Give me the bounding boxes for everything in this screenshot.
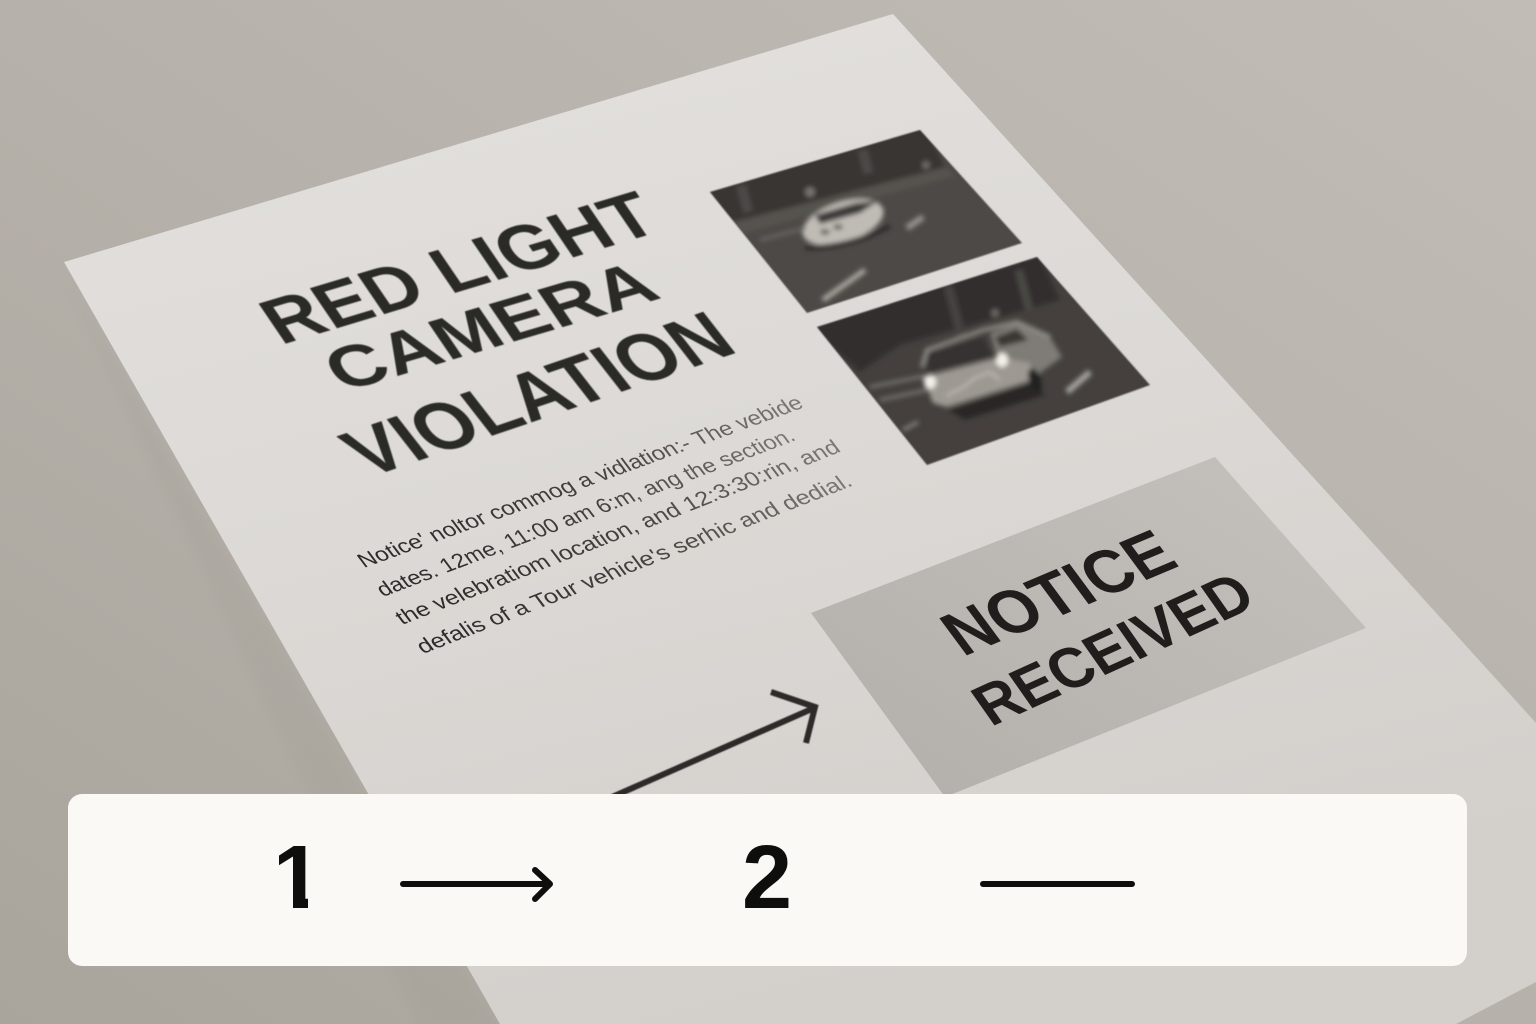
- body line 4: defalis of a Tour vehicle's serhic and dedial.: [412, 470, 857, 658]
- body line 2: dates. 12me, 11:00 am 6:m, ang the section.: [372, 425, 800, 601]
- headline: red light camera violation: [245, 178, 750, 491]
- arrow on paper pointing to notice box: [612, 692, 815, 797]
- paper shadow: [60, 268, 500, 1024]
- arrow between steps: [403, 870, 550, 899]
- headline line 1: RED LIGHT: [245, 178, 671, 357]
- body paragraph: [353, 392, 857, 658]
- camera photo 1: blurred car on road: [709, 129, 1022, 314]
- camera photo 2: car close-up on road: [816, 256, 1150, 466]
- headline line 3: VIOLATION: [326, 298, 750, 491]
- body line 3: the velebratiom location, and 12:3:30:rin, and: [391, 437, 845, 629]
- dash line after step 2: [983, 881, 1132, 887]
- box label line 1: NOTICE: [927, 517, 1190, 669]
- status box: notice received: [811, 457, 1366, 797]
- box label line 2: RECEIVED: [960, 560, 1267, 738]
- step number 1: 1: [272, 828, 322, 928]
- step strip panel: [68, 794, 1467, 966]
- step number 2: 2: [742, 828, 792, 928]
- headline line 2: CAMERA: [310, 249, 671, 404]
- body line 1: Notice' noltor commog a vidlation:- The vebide: [353, 392, 808, 572]
